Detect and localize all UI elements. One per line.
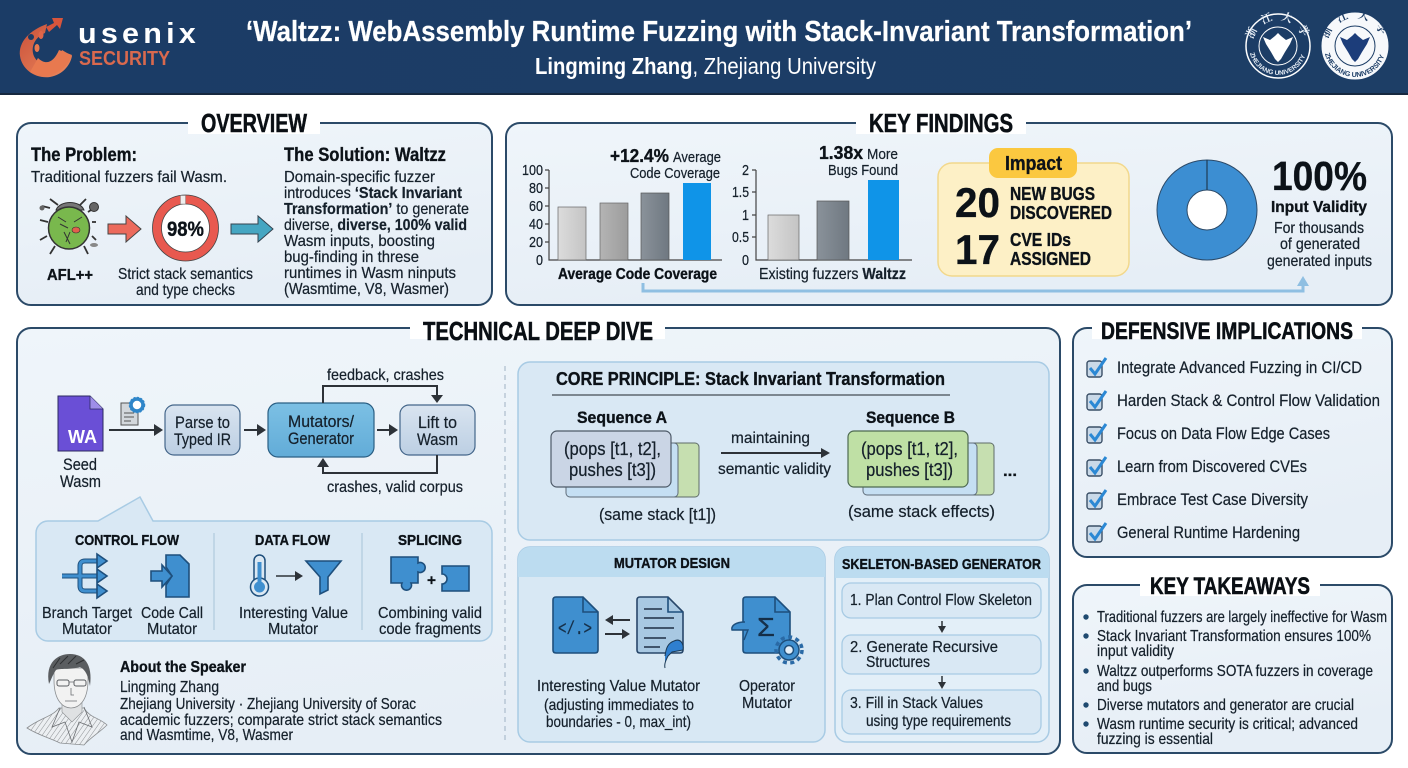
about the speaker: academic fuzzers; comparate strict stack semantics — [120, 712, 442, 729]
seed wasm label: Seed — [63, 455, 97, 474]
sequence a: Sequence A — [577, 408, 667, 427]
icon: seed wasm file: WA — [68, 427, 97, 447]
node: mutators generator: Mutators/ — [288, 412, 354, 431]
step 2: Structures — [866, 654, 930, 671]
takeaway list — [1083, 609, 1387, 748]
takeaway list: input validity — [1097, 643, 1174, 660]
sequence b — [848, 408, 1017, 521]
label: feedback crashes: feedback, crashes — [327, 367, 444, 384]
usenix security logo: usenix — [78, 18, 200, 50]
chart: bugs found: 0 — [742, 252, 749, 269]
splicing heading: SPLICING — [398, 532, 462, 549]
interesting value mutator label: Interesting Value — [239, 605, 348, 622]
input validity stat: of generated — [1280, 236, 1360, 253]
step 1 — [842, 583, 1041, 618]
talk title: ‘Waltzz: WebAssembly Runtime Fuzzing with Stack-Invariant Transformation’ — [246, 16, 1192, 48]
about the speaker: Lingming Zhang — [120, 679, 219, 696]
icon: thermometer — [250, 555, 268, 596]
sequence a: (pops [t1, t2], — [564, 439, 661, 459]
university seal outline: ZHEJIANG UNIVERSITY — [1250, 52, 1305, 75]
problem caption — [118, 266, 253, 299]
icon: operator document gear: Σ — [757, 612, 775, 642]
panel: key findings — [506, 108, 1392, 305]
input validity stat — [1267, 153, 1372, 270]
node: lift to wasm: Lift to — [418, 413, 457, 432]
code call mutator label: Mutator — [147, 621, 198, 638]
combining fragments label: code fragments — [379, 621, 481, 638]
the solution text: diverse, diverse, 100% valid — [284, 217, 467, 234]
arrows: exchange — [605, 615, 630, 639]
chart: bugs found: Bugs Found — [828, 162, 898, 179]
impact card: 17 — [955, 226, 1000, 273]
icon: puzzle pieces — [391, 557, 469, 591]
label: crashes valid corpus: crashes, valid corpus — [327, 479, 463, 496]
panel: overview — [17, 108, 492, 305]
arrow: maintaining semantic validity — [718, 430, 831, 478]
chart: bugs found: More — [867, 146, 898, 163]
seed wasm label — [60, 455, 101, 491]
takeaway list: Wasm runtime security is critical; advanced — [1097, 716, 1358, 733]
chart: bugs found: Existing fuzzers Waltzz — [759, 266, 906, 283]
the solution text: bug-finding in threse — [284, 249, 419, 266]
arrow: coverage to validity — [643, 276, 1309, 291]
node: parse to typed ir: Parse to — [175, 413, 230, 432]
sequence b: (same stack effects) — [848, 502, 995, 521]
chart: bugs found: 0.5 — [732, 229, 749, 246]
chart: average code coverage: 60 — [529, 198, 543, 215]
icon: listing document — [637, 597, 683, 668]
portrait: speaker sketch — [27, 654, 107, 745]
arrow: corpus loop — [317, 455, 437, 473]
heading: defensive implications: DEFENSIVE IMPLICATIONS — [1101, 318, 1353, 345]
arrow: step 2 to 3 — [938, 676, 946, 689]
interesting value caption: (adjusting immediates to — [544, 697, 694, 714]
panel: key takeaways — [1073, 573, 1392, 753]
node: lift to wasm: Wasm — [417, 430, 458, 449]
chart: 98% failure ring: 98% — [167, 218, 204, 241]
university seal solid: ZHEJIANG UNIVERSITY — [1325, 52, 1384, 77]
impact card: NEW BUGS — [1010, 184, 1095, 204]
chart: bugs found: 1 — [742, 207, 749, 224]
usenix security logo: SECURITY — [79, 48, 171, 70]
about the speaker — [120, 659, 442, 744]
sequence a: pushes [t3]) — [569, 460, 656, 480]
operator caption: Operator — [739, 678, 796, 695]
icon: parser document gear — [121, 398, 144, 425]
mutator categories callout — [36, 497, 492, 641]
takeaway list: and bugs — [1097, 678, 1152, 695]
combining fragments label: Combining valid — [378, 605, 482, 622]
impact card — [938, 148, 1129, 276]
interesting value caption: Interesting Value Mutator — [537, 678, 701, 695]
chart: average code coverage: 40 — [529, 216, 543, 233]
arrow: parse to mutators — [244, 424, 266, 436]
heading: key findings: KEY FINDINGS — [869, 108, 1013, 138]
arrow: teal — [231, 216, 273, 242]
input validity stat: Input Validity — [1271, 199, 1367, 216]
item: integrate: Integrate Advanced Fuzzing in CI/CD — [1117, 358, 1362, 377]
interesting value caption: boundaries - 0, max_int) — [546, 714, 691, 731]
sequence b: Sequence B — [866, 408, 955, 427]
arrow: maintaining semantic validity: semantic validity — [718, 461, 831, 478]
the solution text: Wasm inputs, boosting — [284, 233, 435, 250]
branch target mutator label: Branch Target — [42, 605, 132, 622]
chart: average code coverage: 20 — [529, 234, 543, 251]
node: parse to typed ir: Typed IR — [174, 430, 231, 449]
chart: 98% failure ring — [152, 195, 218, 261]
panel: defensive implications — [1073, 317, 1392, 557]
step 1: 1. Plan Control Flow Skeleton — [850, 592, 1032, 609]
the solution text — [284, 145, 469, 298]
impact card: ASSIGNED — [1010, 249, 1091, 269]
the problem text: Traditional fuzzers fail Wasm. — [31, 169, 227, 186]
header band — [0, 0, 1408, 95]
usenix security logo — [20, 18, 200, 77]
arrow: seed to parse — [109, 424, 163, 436]
impact card: DISCOVERED — [1010, 203, 1112, 223]
step 3 — [842, 690, 1041, 734]
chart: average code coverage: Average Code Coverage — [558, 266, 717, 283]
operator caption — [739, 678, 796, 712]
arrow: thermometer to funnel — [276, 571, 303, 581]
icon: code document: </.> — [558, 620, 592, 640]
sequence b: pushes [t3]) — [866, 460, 953, 480]
interesting value caption — [537, 678, 701, 731]
panel: skeleton based generator — [835, 547, 1049, 742]
heading: overview: OVERVIEW — [201, 108, 307, 138]
heading: key takeaways: KEY TAKEAWAYS — [1150, 573, 1310, 600]
core principle heading: CORE PRINCIPLE: Stack Invariant Transformation — [556, 369, 945, 389]
problem caption: Strict stack semantics — [118, 266, 253, 283]
about the speaker: About the Speaker — [120, 659, 246, 676]
chart: average code coverage — [522, 146, 722, 283]
icon: seed wasm file — [58, 396, 103, 451]
step 2: 2. Generate Recursive — [850, 639, 998, 656]
input validity stat: For thousands — [1274, 220, 1364, 237]
panel: technical deep dive — [17, 316, 1060, 754]
code call mutator label — [141, 605, 203, 638]
icon: bug — [40, 199, 98, 254]
chart: average code coverage: 80 — [529, 180, 543, 197]
interesting value mutator label: Mutator — [268, 621, 319, 638]
university seal outline — [1244, 12, 1311, 79]
takeaway list: Diverse mutators and generator are crucial — [1097, 697, 1354, 714]
sequence a: (same stack [t1]) — [599, 505, 716, 524]
heading: technical deep dive: TECHNICAL DEEP DIVE — [423, 316, 653, 346]
step 3: using type requirements — [866, 713, 1011, 730]
input validity stat: 100% — [1272, 153, 1367, 199]
impact card: 20 — [955, 179, 1000, 226]
about the speaker: Zhejiang University · Zhejiang University of Sorac — [120, 696, 416, 713]
university seal solid — [1322, 12, 1388, 80]
panel: mutator design — [518, 547, 825, 742]
arrow: feedback loop — [323, 386, 443, 403]
the solution text: (Wasmtime, V8, Wasmer) — [284, 281, 449, 298]
chart: bugs found: 1.5 — [732, 184, 749, 201]
skeleton heading: SKELETON-BASED GENERATOR — [842, 556, 1041, 573]
university seal outline: 浙江大学 — [1244, 12, 1310, 39]
data flow heading: DATA FLOW — [255, 532, 331, 549]
step 3: 3. Fill in Stack Values — [850, 695, 983, 712]
sequence b: ... — [1003, 463, 1017, 480]
item: focus: Focus on Data Flow Edge Cases — [1117, 424, 1330, 443]
node: lift to wasm — [400, 405, 475, 455]
the problem text — [31, 145, 227, 186]
the solution text: Transformation’ to generate — [284, 201, 469, 218]
icon: branch target — [62, 554, 107, 598]
chart: average code coverage: 100 — [522, 162, 543, 179]
icon: code call — [151, 555, 189, 597]
chart: bugs found: 1.38x — [819, 143, 863, 163]
arrow: mutators to lift — [377, 424, 398, 436]
sequence b: (pops [t1, t2], — [861, 439, 958, 459]
node: parse to typed ir — [165, 405, 240, 455]
step 2 — [842, 635, 1041, 674]
takeaway list: fuzzing is essential — [1097, 731, 1213, 748]
chart: bugs found — [732, 143, 912, 283]
interesting value mutator label — [239, 605, 348, 638]
item: general: General Runtime Hardening — [1117, 523, 1300, 542]
chart: average code coverage: Average — [673, 149, 721, 166]
node: mutators generator: Generator — [288, 429, 354, 448]
university seal solid: 浙江大学 — [1323, 13, 1385, 38]
control flow heading: CONTROL FLOW — [75, 532, 180, 549]
icon: operator document gear — [732, 597, 802, 663]
speaker line: Lingming Zhang, Zhejiang University — [535, 53, 876, 79]
branch target mutator label — [42, 605, 132, 638]
item: embrace: Embrace Test Case Diversity — [1117, 490, 1308, 509]
branch target mutator label: Mutator — [62, 621, 113, 638]
sequence a — [551, 408, 716, 524]
impact card: CVE IDs — [1010, 230, 1071, 250]
the solution text: The Solution: Waltzz — [284, 145, 446, 166]
icon: code document — [553, 597, 598, 653]
chart: average code coverage: Code Coverage — [630, 165, 720, 182]
afl label: AFL++ — [47, 267, 93, 284]
arrow: step 1 to 2 — [938, 621, 946, 633]
problem caption: and type checks — [136, 282, 235, 299]
impact card: Impact — [1005, 153, 1062, 175]
combining fragments label — [378, 605, 482, 638]
operator caption: Mutator — [742, 695, 793, 712]
chart: input validity donut — [1157, 160, 1257, 260]
node: mutators generator — [268, 403, 374, 457]
arrow: red — [108, 216, 141, 242]
chart: bugs found: 2 — [742, 162, 749, 179]
the solution text: Domain-specific fuzzer — [284, 169, 436, 186]
seed wasm label: Wasm — [60, 472, 101, 491]
the solution text: introduces ‘Stack Invariant — [284, 185, 463, 202]
arrow: maintaining semantic validity: maintaining — [731, 430, 810, 447]
panel: core principle — [518, 362, 1049, 540]
icon: puzzle pieces: + — [427, 572, 436, 589]
icon: funnel — [306, 561, 341, 594]
the solution text: runtimes in Wasm ninputs — [284, 265, 456, 282]
the problem text: The Problem: — [31, 145, 137, 166]
item: learn: Learn from Discovered CVEs — [1117, 457, 1307, 476]
item: harden: Harden Stack & Control Flow Validation — [1117, 391, 1380, 410]
chart: average code coverage: +12.4% — [610, 146, 669, 166]
chart: average code coverage: 0 — [536, 252, 543, 269]
mutator design heading: MUTATOR DESIGN — [614, 555, 730, 572]
about the speaker: and Wasmtime, V8, Wasmer — [120, 727, 294, 744]
code call mutator label: Code Call — [141, 605, 203, 622]
input validity stat: generated inputs — [1267, 253, 1372, 270]
